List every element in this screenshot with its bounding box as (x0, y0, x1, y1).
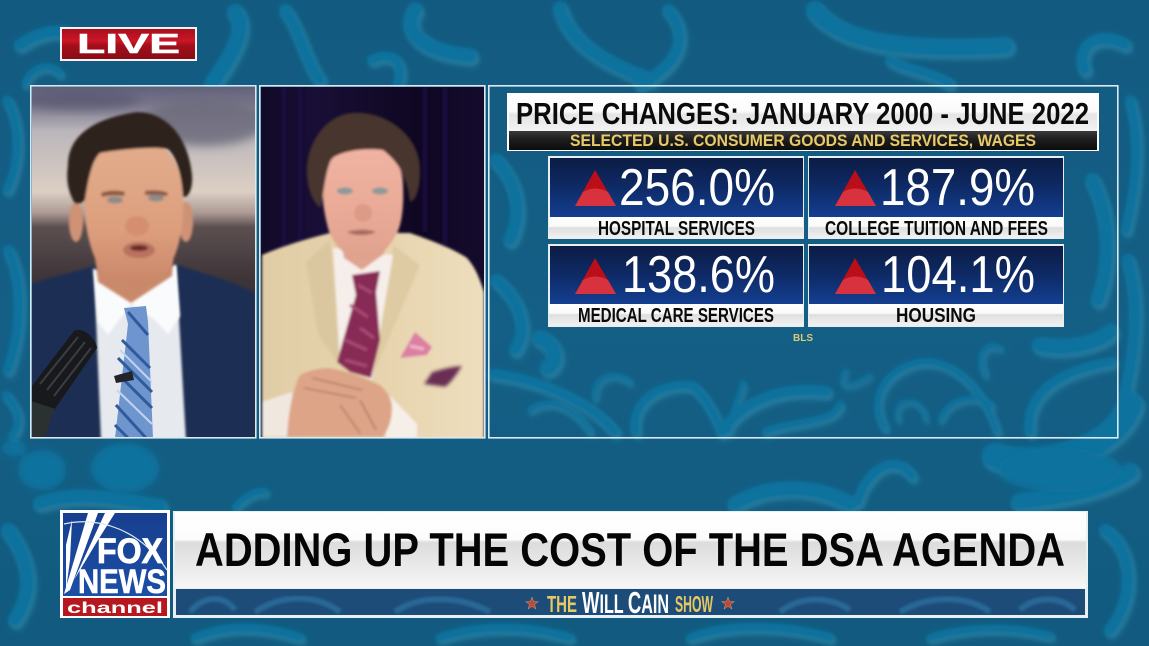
panel inner left scrolls (496, 160, 517, 240)
channel word: channel (67, 600, 163, 617)
channel strip (63, 598, 167, 616)
host suit (30, 264, 255, 440)
label: HOSPITAL SERVICES (598, 218, 755, 240)
show name: WILL CAIN (582, 585, 669, 620)
guest neck and face (342, 250, 385, 271)
panel: video frames (31, 86, 1118, 438)
percentage: 138.6% (622, 246, 775, 304)
guest tie (337, 271, 380, 378)
show strip (176, 589, 1085, 615)
up arrow (835, 170, 876, 206)
panel inner bottom scrolls (492, 374, 615, 432)
source credit: BLS (793, 332, 813, 344)
live badge: LIVE (77, 28, 180, 59)
label: HOUSING (896, 305, 976, 327)
pocket square (400, 332, 432, 358)
chart heading (507, 93, 1099, 151)
host head (67, 112, 193, 303)
host tie (115, 306, 153, 438)
star right (722, 597, 734, 609)
host collar (93, 264, 180, 335)
headline banner (173, 511, 1088, 620)
right edge scrolls (1126, 100, 1137, 230)
percentage: 104.1% (881, 246, 1035, 304)
up arrow (835, 258, 876, 294)
host shirt (94, 266, 186, 440)
guest shirt (333, 248, 393, 380)
label: COLLEGE TUITION AND FEES (825, 218, 1048, 240)
heading subtitle bar (509, 131, 1097, 150)
show name (526, 585, 734, 620)
guest hands (287, 368, 392, 437)
top band scrolls (20, 32, 85, 45)
live badge (60, 27, 197, 61)
star left (526, 597, 538, 609)
stat card: housing (808, 244, 1064, 327)
guest jacket (262, 233, 484, 440)
up arrow (575, 258, 616, 294)
panel: host video (32, 87, 255, 437)
lapel mic (114, 371, 134, 383)
lower band scrolls (995, 405, 1130, 460)
show name: THE (547, 591, 577, 617)
percentage: 256.0% (619, 159, 775, 217)
guest jacket gap (424, 366, 462, 387)
NEWS wordmark: NEWS (78, 563, 166, 601)
FOX wordmark: FOX (97, 532, 164, 571)
up arrow (575, 170, 616, 206)
panel: guest video (260, 85, 485, 440)
lower band leaf blobs (2, 440, 1122, 493)
label: MEDICAL CARE SERVICES (578, 305, 774, 327)
stat card: hospital services (548, 156, 804, 240)
heading subtitle: SELECTED U.S. CONSUMER GOODS AND SERVICES, WAGES (570, 132, 1036, 150)
left edge scrolls (7, 100, 18, 190)
microphone (32, 330, 97, 437)
stat card: medical care (548, 244, 804, 327)
fox news channel logo (60, 510, 170, 618)
guest shirt cuffs (262, 392, 294, 437)
bottom band scrolls (8, 530, 28, 620)
searchlights (64, 513, 115, 594)
stat card: college tuition (808, 156, 1064, 240)
show name: SHOW (675, 591, 713, 617)
guest lapels (308, 244, 338, 358)
percentage: 187.9% (880, 159, 1035, 217)
